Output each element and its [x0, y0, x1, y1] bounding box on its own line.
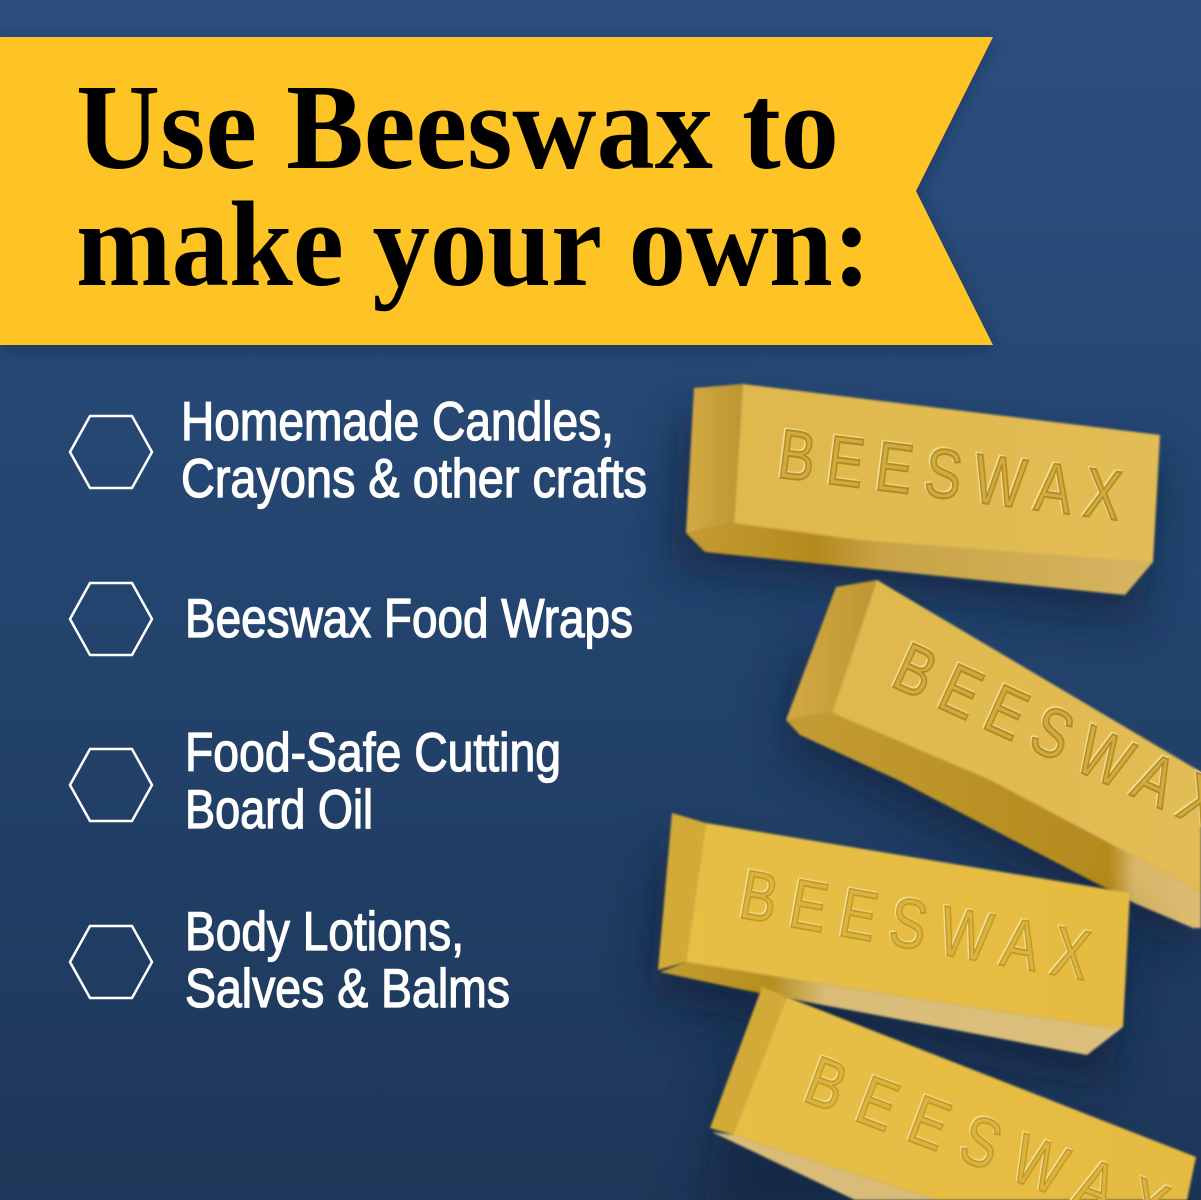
item: candles: Crayons & other crafts — [181, 447, 647, 509]
item: food wraps: Beeswax Food Wraps — [185, 587, 633, 649]
item: candles: Homemade Candles, — [181, 390, 614, 452]
item: cutting board oil: Board Oil — [185, 778, 373, 840]
bar 3: BEESWAX — [734, 856, 1096, 996]
bar 2 — [780, 580, 1201, 960]
beeswax bars — [650, 384, 1201, 1200]
title: make your own: — [76, 177, 871, 312]
item: lotions: Salves & Balms — [185, 957, 510, 1019]
item: food wraps — [70, 583, 633, 655]
item: cutting board oil — [70, 721, 561, 840]
bar 4 — [700, 987, 1198, 1200]
item: cutting board oil: Food-Safe Cutting — [185, 721, 561, 783]
title: Use Beeswax to — [76, 60, 839, 195]
item: candles — [70, 390, 647, 509]
item: lotions — [70, 900, 510, 1019]
bar 1 — [670, 384, 1165, 625]
title — [76, 60, 871, 312]
item: lotions: Body Lotions, — [185, 900, 464, 962]
list of uses — [70, 390, 647, 1019]
bar 1: BEESWAX — [774, 415, 1126, 536]
banner — [0, 37, 993, 350]
bar 3 — [650, 813, 1135, 1090]
